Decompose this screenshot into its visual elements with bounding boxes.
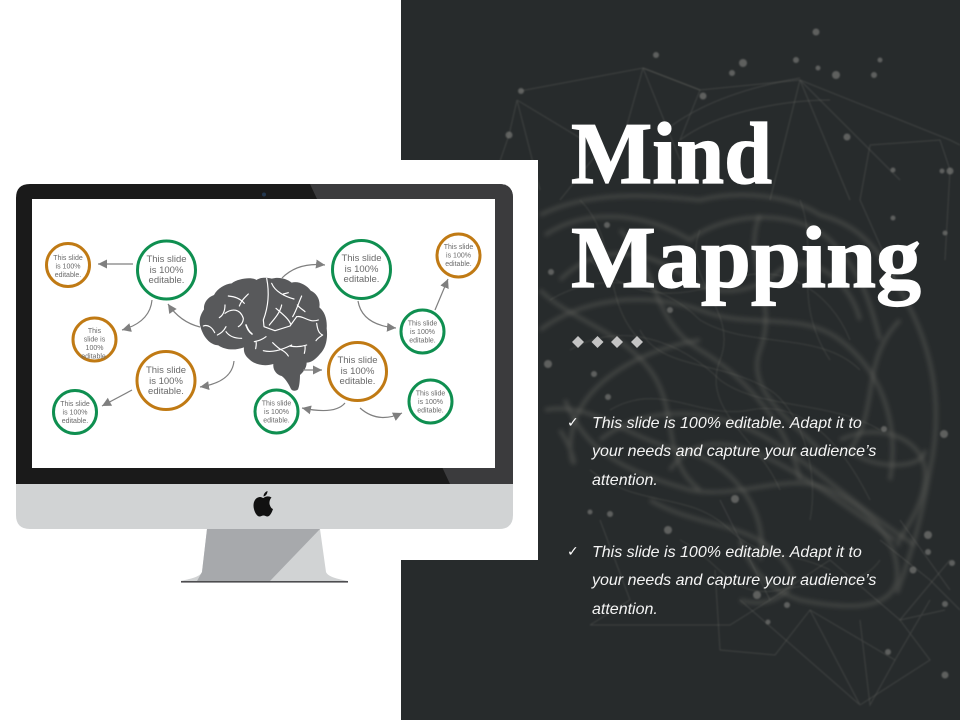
node: green bottom left: [54, 390, 96, 434]
node: orange top left: editable.: [55, 272, 81, 279]
node: green large left: is 100%: [150, 265, 184, 276]
title: Mind: [571, 106, 772, 203]
node: orange top right: [437, 234, 480, 277]
node: green bottom right: This slide: [416, 390, 445, 398]
bullet text 2: This slide is 100% editable. Adapt it to: [592, 544, 862, 561]
node: orange large left: This slide: [146, 365, 186, 376]
node: green large top right: [332, 240, 390, 298]
node: green right: is 100%: [410, 329, 435, 336]
node: green bottom right: editable.: [417, 408, 444, 414]
node: orange large left: [137, 352, 195, 410]
network lines: [490, 68, 960, 705]
brain: [200, 278, 327, 391]
brain strands, fine: [550, 200, 880, 592]
monitor bezel: [16, 184, 513, 484]
node: green bottom center: is 100%: [264, 409, 289, 416]
bullet text 1: attention.: [592, 472, 658, 489]
bezel gloss: [310, 184, 513, 484]
monitor: [16, 184, 513, 583]
brain strands, soft: [540, 195, 936, 606]
node: orange large left: editable.: [148, 386, 184, 397]
webcam: [262, 192, 266, 196]
node: orange large right: This slide: [337, 355, 378, 366]
diamond divider: [572, 336, 643, 348]
node: orange top left: This slide: [53, 255, 83, 262]
node: green bottom center: [255, 390, 298, 433]
bullet text 1: [567, 415, 876, 489]
node: orange top right: is 100%: [446, 252, 471, 260]
node: orange large right: [328, 342, 386, 400]
network dots: [506, 28, 955, 678]
bullet text 1: This slide is 100% editable. Adapt it to: [592, 415, 862, 432]
bullet text 2: [567, 544, 876, 618]
node: green bottom left: is 100%: [63, 410, 87, 416]
arrows: [98, 264, 448, 417]
node: orange large right: is 100%: [341, 366, 375, 377]
node: green large top right: is 100%: [345, 264, 379, 275]
bullet text 1: your needs and capture your audience’s: [591, 443, 876, 460]
node: orange top left: is 100%: [56, 264, 80, 270]
node: green large top right: This slide: [341, 253, 382, 264]
node: orange narrow left: [73, 318, 116, 361]
node: green large left: editable.: [149, 275, 184, 286]
monitor stand: [180, 529, 348, 583]
node: orange large left: is 100%: [149, 376, 183, 387]
node: green bottom left: This slide: [60, 401, 90, 408]
node: orange narrow left: 100%: [86, 345, 103, 352]
bullet text 2: attention.: [592, 601, 658, 618]
node: green bottom right: [409, 380, 452, 423]
node: orange narrow left: editable.: [81, 354, 108, 360]
node: green large left: [138, 241, 196, 299]
node: green right: editable.: [409, 338, 436, 344]
bullet text 1: ✓: [567, 415, 579, 431]
node: orange narrow left: slide is: [84, 336, 106, 344]
bullet text 2: ✓: [567, 544, 579, 560]
node: orange narrow left: This: [88, 328, 102, 335]
monitor screen: [32, 199, 495, 468]
panel: dark background: [401, 0, 960, 720]
node: green bottom center: editable.: [263, 418, 290, 424]
node: orange large right: editable.: [340, 376, 375, 387]
node: green bottom left: editable.: [62, 418, 88, 425]
node: green bottom right: is 100%: [418, 399, 443, 406]
node: green right: This slide: [408, 320, 437, 328]
white panel behind monitor: [401, 160, 538, 560]
monitor chin: [16, 484, 513, 529]
node: green right: [401, 310, 444, 353]
node: green bottom center: This slide: [262, 400, 291, 408]
node: orange top left: [46, 244, 90, 286]
icon: apple logo: [254, 491, 273, 516]
node: green large top right: editable.: [344, 274, 379, 285]
title: [571, 106, 921, 307]
bullet text 2: your needs and capture your audience’s: [591, 572, 876, 589]
title: Mapping: [571, 210, 921, 307]
node: orange top right: This slide: [444, 244, 473, 251]
node: green large left: This slide: [146, 254, 187, 265]
mind map: [46, 234, 480, 434]
node: orange top right: editable.: [445, 261, 472, 268]
